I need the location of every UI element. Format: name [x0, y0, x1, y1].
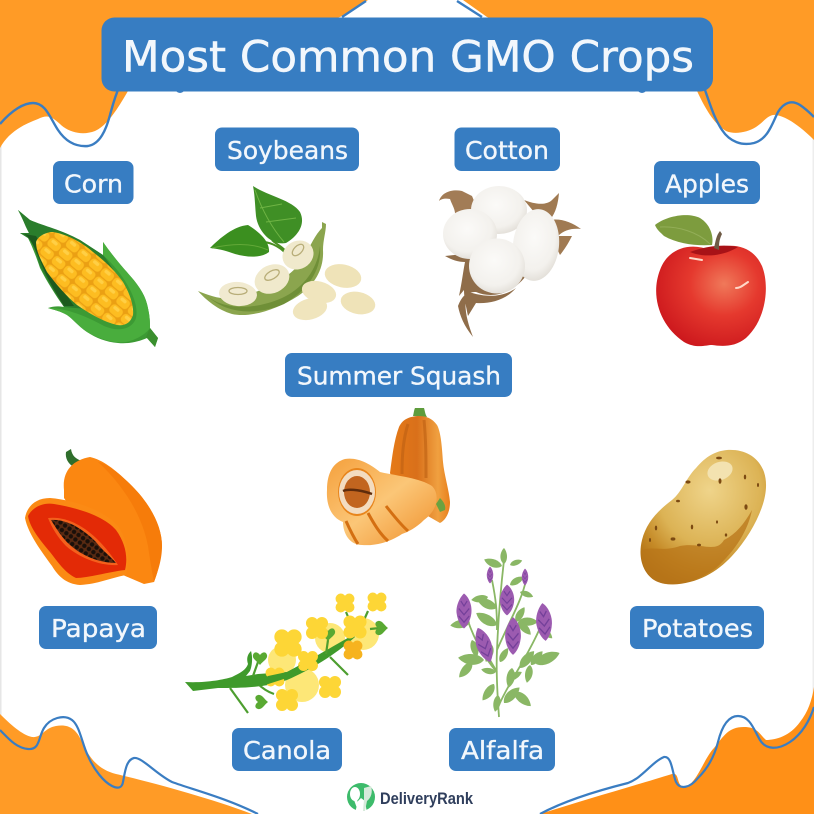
corner shape: top left	[0, 0, 368, 148]
label: Soybeans	[215, 128, 359, 171]
icon: apple	[655, 215, 766, 346]
label: Summer Squash	[285, 353, 512, 397]
label: Canola: Canola	[243, 736, 331, 765]
icon: alfalfa	[450, 548, 562, 717]
label: Alfalfa	[449, 728, 555, 771]
icon: summer squash	[327, 408, 450, 545]
label: Canola	[232, 728, 342, 771]
label: Cotton	[454, 128, 560, 171]
label: Corn: Corn	[64, 170, 123, 198]
icon: corn	[18, 210, 158, 347]
icon: soybeans	[198, 186, 377, 324]
icon: canola	[185, 593, 388, 713]
label: Apples: Apples	[665, 170, 749, 198]
icon: cotton	[439, 186, 581, 337]
icon: potato	[640, 450, 766, 584]
label: Apples	[654, 161, 760, 204]
label: Potatoes: Potatoes	[642, 614, 753, 643]
label: Summer Squash: Summer Squash	[297, 362, 501, 390]
icon: papaya	[25, 449, 162, 585]
corner shape: bottom left	[0, 714, 258, 814]
logo: DeliveryRank	[347, 783, 474, 813]
corner shape: top right	[457, 0, 814, 144]
label: Corn	[53, 161, 134, 204]
label: Potatoes	[630, 606, 764, 649]
title: Most Common GMO Crops	[122, 32, 694, 82]
logo: DeliveryRank: DeliveryRank	[380, 790, 474, 808]
label: Soybeans: Soybeans	[227, 136, 348, 165]
label: Papaya	[39, 606, 157, 649]
corner shape: bottom right	[540, 687, 814, 814]
label: Alfalfa: Alfalfa	[461, 736, 544, 765]
label: Cotton: Cotton	[465, 136, 549, 165]
label: Papaya: Papaya	[51, 614, 146, 643]
title	[102, 18, 713, 93]
